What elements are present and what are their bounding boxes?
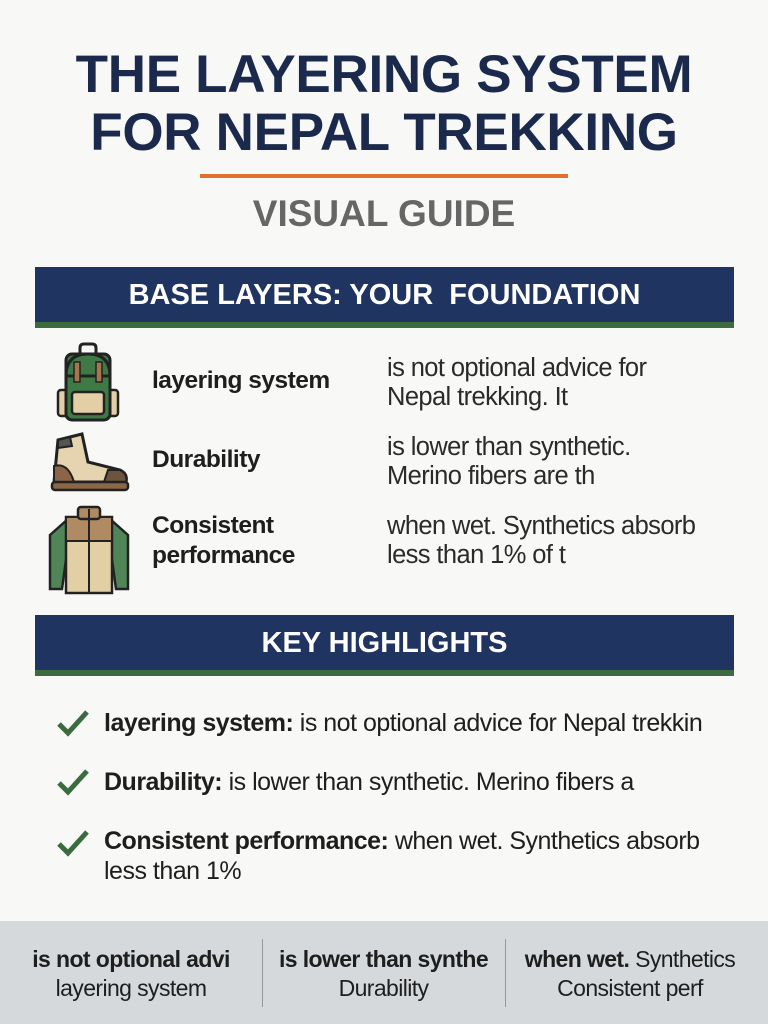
label: durability: Durability — [152, 446, 260, 473]
summary 2: Durability — [339, 975, 428, 1001]
title: FOR NEPAL TREKKING — [90, 103, 678, 162]
summary 3: when wet. Synthetics — [525, 946, 735, 972]
icon: jacket — [48, 506, 130, 594]
title: THE LAYERING SYSTEM — [76, 45, 692, 104]
desc 1: is not optional advice for — [387, 354, 646, 382]
desc 1: Nepal trekking. It — [387, 383, 568, 411]
desc 3 — [387, 512, 695, 569]
desc 1 — [387, 354, 647, 411]
subtitle: VISUAL GUIDE — [253, 193, 515, 234]
desc 3: when wet. Synthetics absorb — [387, 512, 695, 540]
icon: boot — [50, 432, 130, 492]
label: consistent performance — [152, 512, 295, 569]
highlight 3: less than 1% — [104, 857, 241, 885]
highlight 3 — [57, 827, 700, 885]
title — [76, 45, 692, 162]
desc 2: Merino fibers are th — [387, 462, 595, 490]
highlight 1: layering system: is not optional advice for Nepal trekkin — [104, 709, 702, 737]
summary 3: Consistent perf — [557, 975, 703, 1001]
banner: key highlights — [35, 615, 734, 676]
banner: base layers — [35, 267, 734, 328]
icon: check — [57, 769, 89, 796]
summary 1: is not optional advi — [32, 946, 230, 972]
orange divider — [200, 174, 568, 178]
summary 1 — [32, 946, 230, 1001]
icon: check — [57, 710, 89, 737]
summary 3 — [524, 946, 735, 1001]
desc 2 — [387, 433, 631, 490]
label: consistent performance: performance — [152, 542, 295, 569]
desc 3: less than 1% of t — [387, 541, 565, 569]
icon: check — [57, 830, 89, 857]
summary 2: is lower than synthe — [279, 946, 488, 972]
summary 2 — [279, 946, 488, 1001]
summary 1: layering system — [56, 975, 206, 1001]
label: layering system: layering system — [152, 367, 330, 394]
label: consistent performance: Consistent — [152, 512, 274, 539]
highlight 2: Durability: is lower than synthetic. Merino fibers a — [104, 768, 634, 796]
bottom summary bar — [0, 921, 768, 1024]
desc 2: is lower than synthetic. — [387, 433, 631, 461]
icon: backpack — [56, 342, 120, 422]
banner: base layers: BASE LAYERS: YOUR FOUNDATION — [129, 279, 640, 311]
banner: key highlights: KEY HIGHLIGHTS — [262, 627, 508, 659]
highlight 3: Consistent performance: when wet. Synthetics absorb — [104, 827, 700, 855]
